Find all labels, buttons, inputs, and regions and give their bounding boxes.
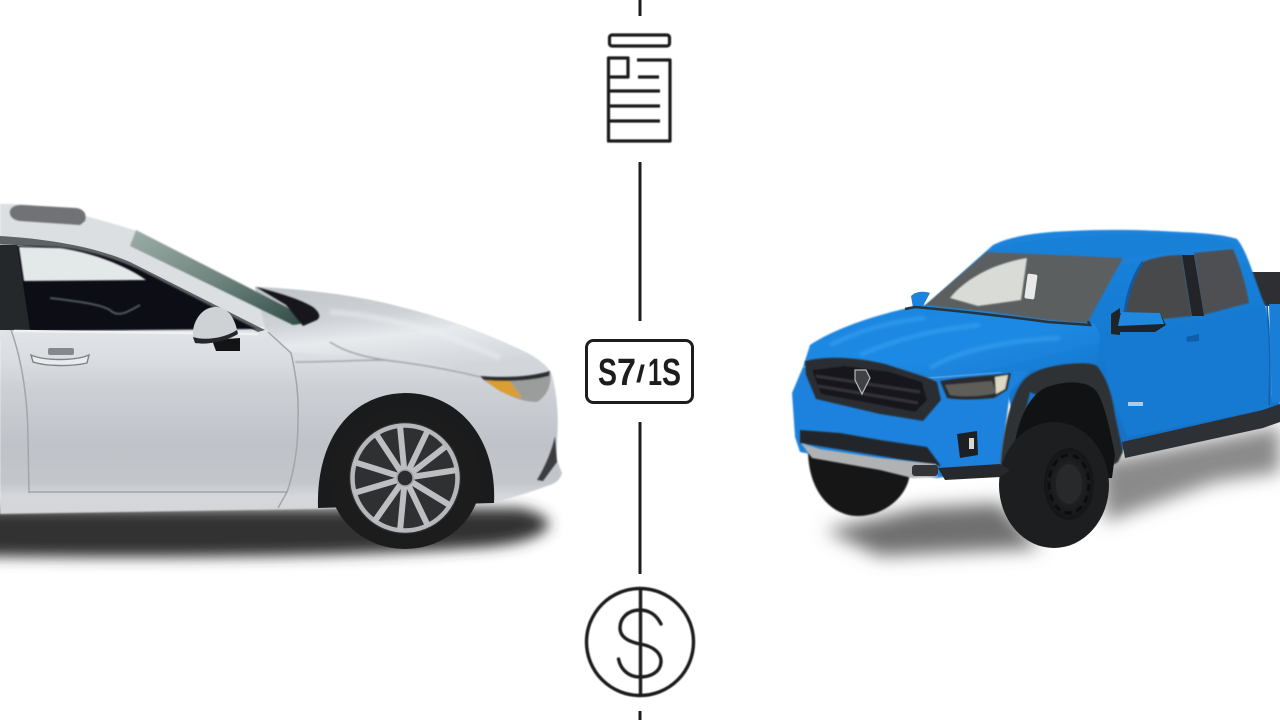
- truck fender flare: [1000, 363, 1123, 476]
- connector line middle upper: [638, 162, 642, 321]
- truck wheel well: [1012, 382, 1115, 480]
- truck door seam: [1267, 305, 1270, 405]
- truck hood: [803, 305, 1100, 378]
- sedan door seams: [11, 330, 298, 508]
- sedan hub: [397, 470, 413, 486]
- sedan sunroof: [10, 205, 86, 225]
- truck right mirror: [1111, 308, 1166, 335]
- icon: dollar coin: [586, 588, 694, 696]
- truck headlight: [940, 373, 1011, 400]
- sedan cowl: [256, 287, 319, 326]
- truck hood creases: [830, 318, 1060, 368]
- truck wiper line: [905, 307, 1090, 325]
- sedan lower grille: [537, 436, 557, 481]
- truck cab: [923, 230, 1280, 450]
- sedan body: [0, 287, 562, 514]
- truck badge: [1128, 402, 1143, 406]
- sedan B-pillar: [0, 245, 30, 330]
- icon: document: [608, 35, 670, 141]
- truck windshield: [923, 252, 1123, 323]
- sedan ground shadow: [0, 508, 549, 557]
- truck roof highlight: [987, 234, 1238, 258]
- truck front side window: [1124, 255, 1192, 323]
- sedan wheel arch: [318, 393, 494, 508]
- truck side ground shadow: [1100, 426, 1280, 522]
- truck rear body panel: [1269, 304, 1280, 403]
- truck grille: [805, 358, 941, 421]
- sedan window reflection: [19, 247, 146, 281]
- truck lower valance: [938, 464, 1010, 480]
- truck left mirror: [911, 292, 930, 308]
- truck window pillar: [1182, 255, 1204, 316]
- truck grille emblem: [855, 370, 870, 394]
- silver sedan: [0, 204, 562, 557]
- truck front bumper body: [792, 362, 1030, 478]
- truck right door: [1103, 305, 1269, 437]
- price badge text: S: [598, 352, 617, 394]
- sedan tyre: [329, 407, 481, 549]
- price badge text: /: [636, 361, 645, 388]
- blue pickup truck: [792, 230, 1280, 556]
- connector line middle lower: [638, 422, 642, 574]
- sedan roof and cabin: [0, 204, 305, 340]
- connector line top: [638, 0, 642, 16]
- price badge text: S: [662, 352, 681, 394]
- sedan headlight: [480, 371, 550, 402]
- sedan door handle: [31, 355, 89, 366]
- sedan windshield: [130, 230, 308, 325]
- sedan side mirror: [193, 307, 240, 351]
- truck bed: [1250, 272, 1280, 306]
- truck skid plate: [801, 443, 938, 478]
- truck fog light: [957, 431, 978, 458]
- sedan interior highlight: [50, 298, 140, 314]
- centre timeline: [586, 0, 694, 720]
- sedan hood sweep: [330, 312, 500, 358]
- truck front main tyre: [999, 422, 1109, 548]
- truck rear side window: [1194, 249, 1249, 315]
- sedan window trim: [0, 236, 265, 332]
- truck rocker sill: [1122, 404, 1280, 458]
- sedan hood crease: [295, 342, 480, 377]
- truck door handle: [1186, 334, 1199, 342]
- sedan door handle recess: [48, 348, 74, 355]
- sedan front wheel: [318, 393, 494, 549]
- truck front ground shadow: [825, 503, 1040, 556]
- truck window surround: [1124, 262, 1143, 323]
- price badge text: 1: [648, 352, 662, 394]
- truck tow hooks: [912, 465, 938, 476]
- truck sunshade reflection: [950, 258, 1027, 306]
- connector line bottom: [638, 711, 642, 720]
- truck interior mirror: [1024, 273, 1038, 300]
- sedan side window: [0, 245, 256, 331]
- truck lower intake: [800, 430, 941, 466]
- sedan spokes: [354, 426, 457, 531]
- sedan door belt line: [14, 331, 258, 334]
- price badge text: 7: [617, 352, 636, 394]
- sedan rim: [349, 422, 461, 534]
- price badge: [586, 340, 692, 402]
- sedan hood: [255, 287, 551, 377]
- truck rear-side front tyre: [808, 450, 910, 516]
